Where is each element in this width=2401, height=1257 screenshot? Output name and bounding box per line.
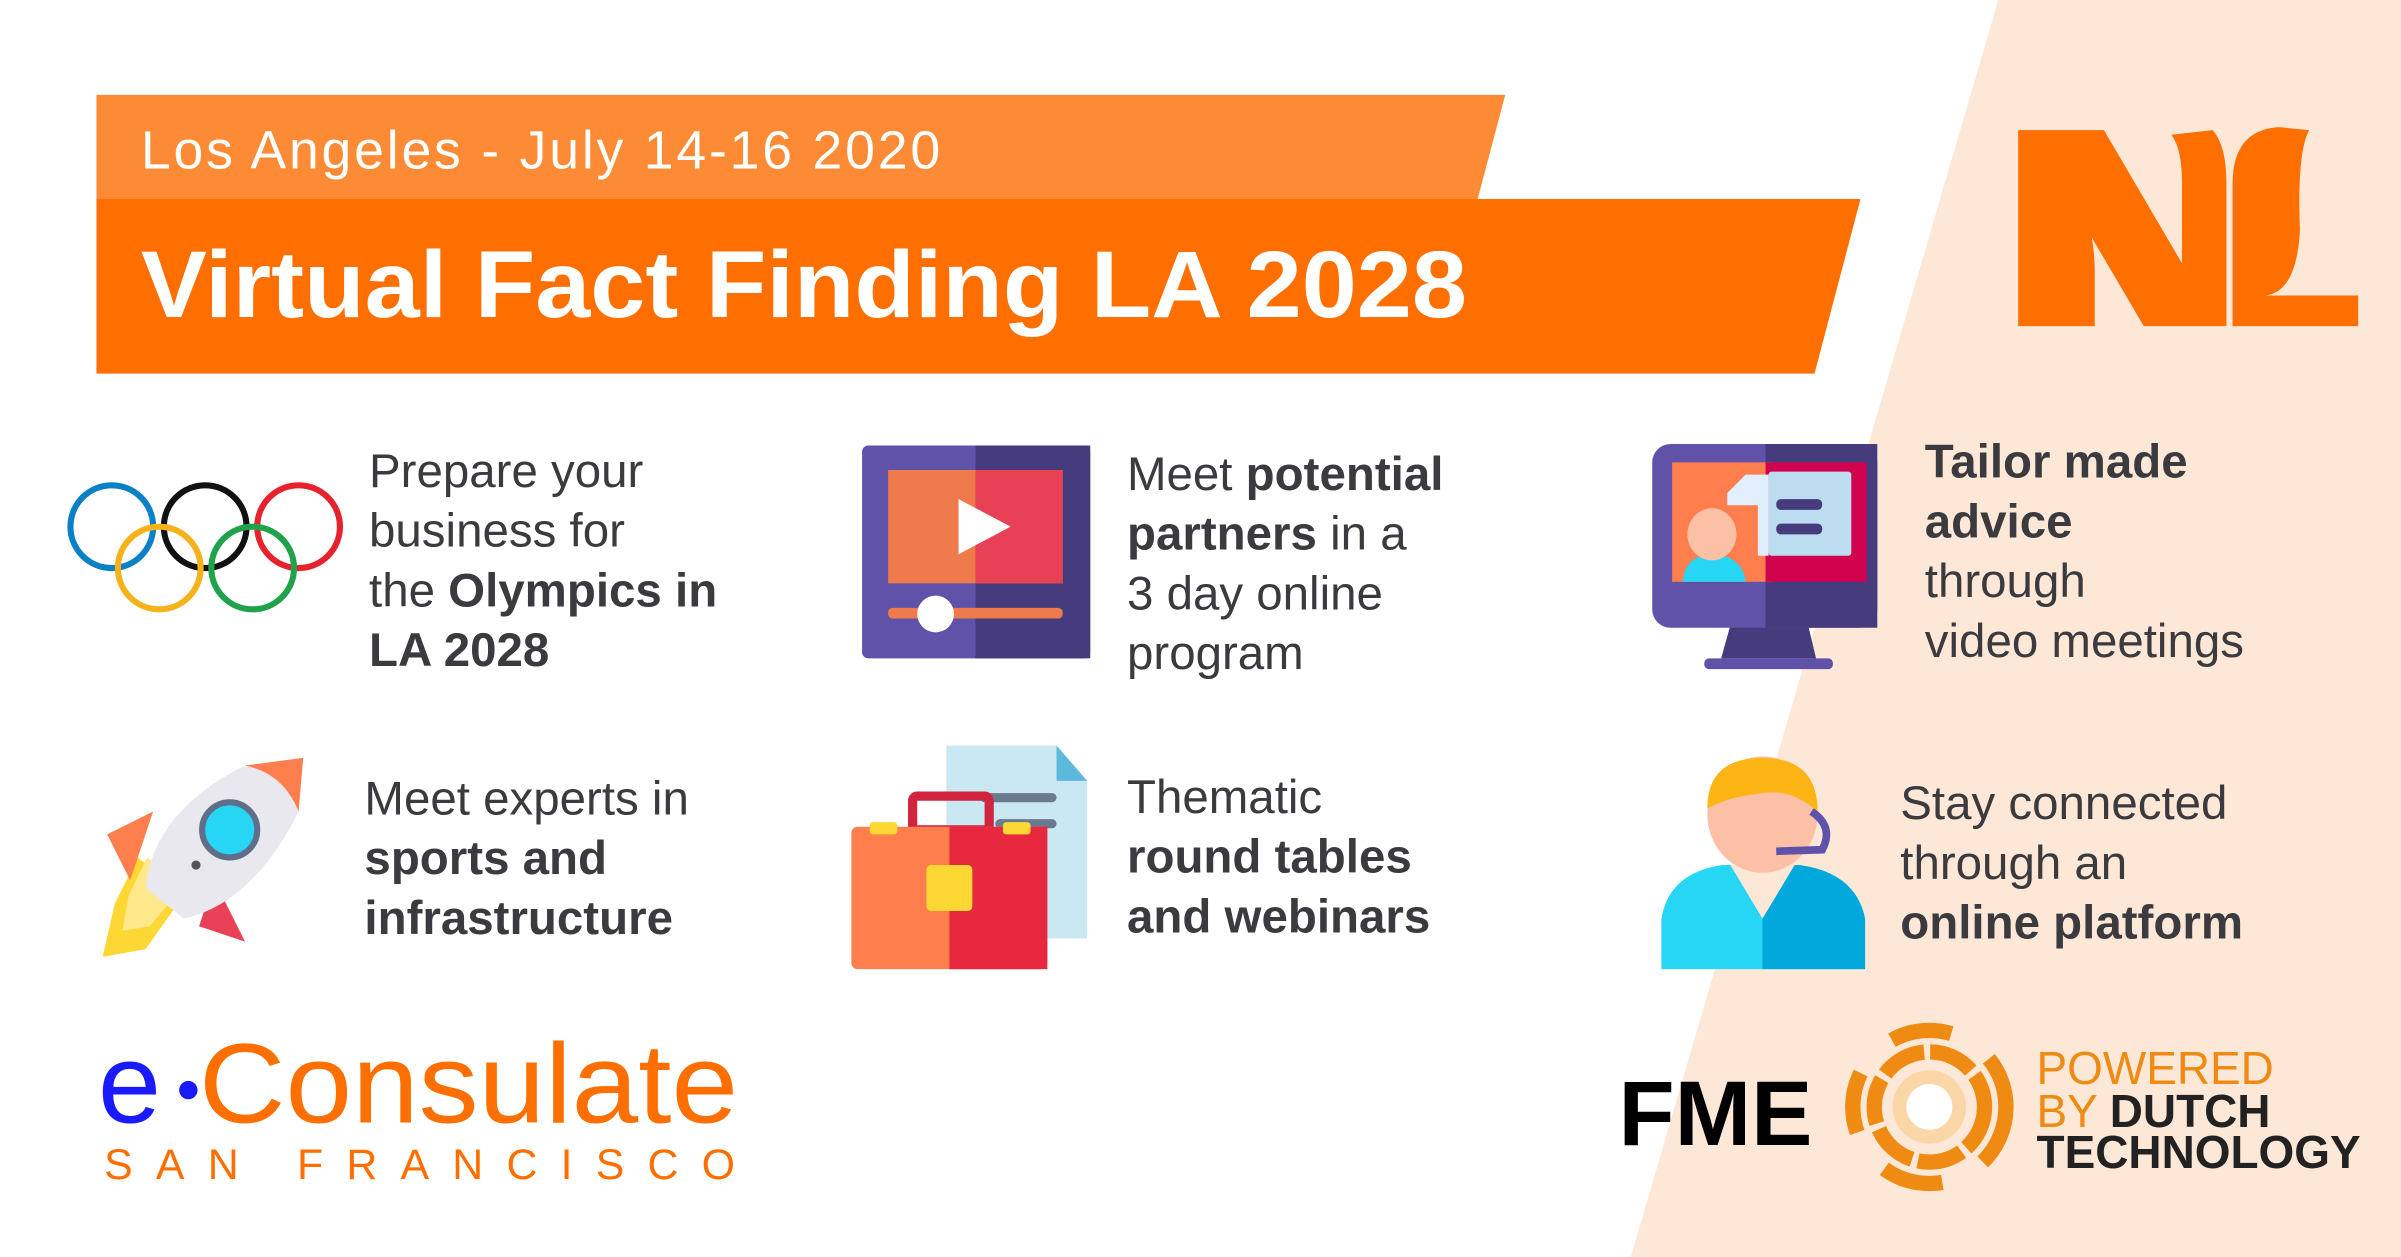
item: olympics: [70, 445, 717, 677]
item: tailor made advice: advice: [1925, 495, 2073, 548]
icon: briefcase with documents: [851, 746, 1087, 969]
item: experts: [103, 758, 689, 957]
date banner: [96, 95, 1505, 199]
item: tailor made advice: through: [1925, 555, 2086, 608]
icon: video player: [862, 446, 1090, 658]
logo: eConsulate San Francisco: [98, 1020, 738, 1189]
item: tailor made advice: Tailor made: [1925, 436, 2188, 489]
logo: eConsulate San Francisco: SAN FRANCISCO: [104, 1141, 735, 1189]
item: olympics: Prepare your: [369, 445, 644, 498]
item: partners: 3 day online: [1127, 567, 1383, 620]
item: experts: Meet experts in: [364, 773, 689, 826]
item: partners: program: [1127, 627, 1304, 680]
peach background panel: [1631, 0, 2401, 1257]
icon: olympic rings: [70, 485, 340, 609]
item: partners: [862, 446, 1443, 680]
item: round tables: and webinars: [1127, 890, 1430, 943]
date banner: Los Angeles - July 14-16 2020: [141, 120, 940, 180]
logo: FME powered by dutch technology: POWERED: [2037, 1042, 2274, 1094]
item: round tables: Thematic: [1127, 771, 1322, 824]
item: experts: sports and: [364, 832, 607, 885]
item: partners: Meet potential: [1127, 448, 1443, 501]
item: online platform: online platform: [1900, 897, 2243, 950]
item: online platform: [1661, 756, 2243, 969]
logo: FME powered by dutch technology: [1619, 1030, 2361, 1184]
title banner: Virtual Fact Finding LA 2028: [141, 232, 1467, 338]
logo: FME powered by dutch technology: BY DUTCH: [2037, 1085, 2270, 1137]
item: tailor made advice: video meetings: [1925, 615, 2244, 668]
item: olympics: the Olympics in: [369, 564, 717, 617]
icon: person with headset: [1661, 756, 1865, 969]
logo: FME powered by dutch technology: TECHNOLOGY: [2037, 1126, 2361, 1178]
logo: eConsulate San Francisco: Consulate: [199, 1020, 738, 1147]
item: experts: infrastructure: [364, 892, 673, 945]
logo: eConsulate San Francisco: e: [98, 1020, 161, 1147]
item: round tables: [851, 746, 1430, 969]
item: partners: partners in a: [1127, 508, 1407, 561]
item: online platform: through an: [1900, 837, 2127, 890]
NL logo: [2018, 127, 2358, 326]
item: tailor made advice: [1652, 436, 2244, 669]
item: olympics: business for: [369, 505, 625, 558]
logo: FME powered by dutch technology: FME: [1619, 1063, 1812, 1165]
item: olympics: LA 2028: [369, 624, 549, 677]
item: online platform: Stay connected: [1900, 777, 2227, 830]
icon: monitor: [1652, 444, 1877, 669]
title banner: [96, 199, 1860, 374]
item: round tables: round tables: [1127, 831, 1412, 884]
icon: rocket: [103, 758, 303, 957]
